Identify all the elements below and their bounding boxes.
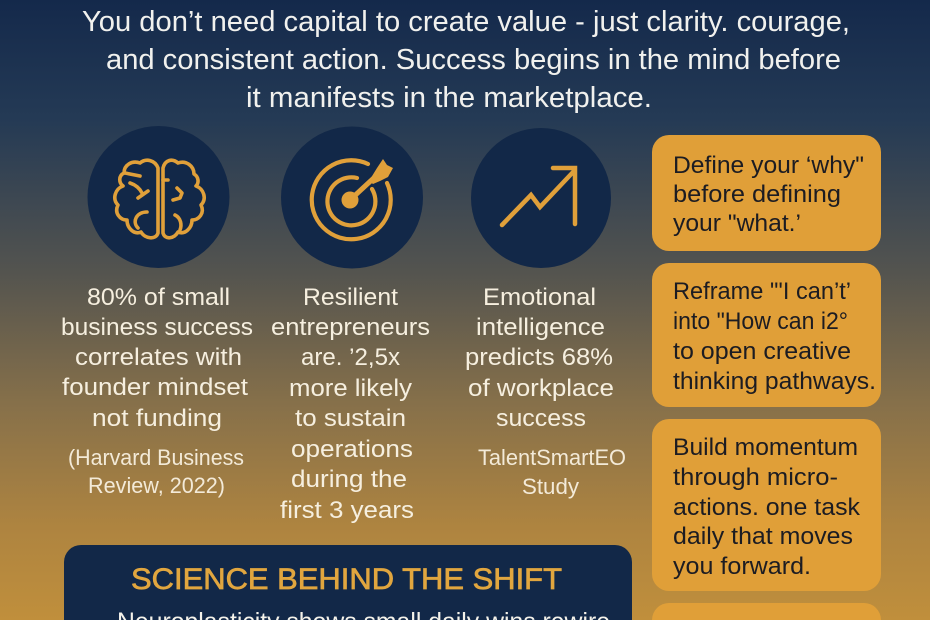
stat text: predicts 68% [465,344,613,371]
panel: tip 4 (cropped) [652,603,881,620]
panel: tip 1: Define your ‘why" [673,152,864,179]
stat text: 80% of small [87,284,230,311]
panel: tip 2 [652,263,881,407]
source [68,445,244,498]
stat text: Emotional [483,284,596,311]
stat text: first 3 years [280,497,414,524]
panel: tip 2: thinking pathways. [673,368,876,395]
panel: tip 3: Build momentum [673,434,858,461]
source [478,445,626,499]
intro text [82,6,850,114]
stat text [61,284,253,432]
stat text: business success [61,314,253,341]
heading: SCIENCE BEHIND THE SHIFT [131,563,562,596]
panel: tip 1: your "what.’ [673,210,801,237]
stat text: during the [291,466,407,493]
stat text: Resilient [303,284,398,311]
intro text: You don’t need capital to create value - just clarity. courage, [82,6,850,38]
source: Review, 2022) [88,473,225,498]
stat text: not funding [92,405,222,432]
intro text: and consistent action. Success begins in the mind before [106,44,841,76]
stat text: to sustain [295,405,406,432]
stat text: founder mindset [62,374,248,401]
icon: target [281,126,423,268]
panel: stat 3 growth [465,128,626,499]
panel: tip 1: before defining [673,181,841,208]
stat text: correlates with [75,344,242,371]
panel: tip 3 [652,419,881,591]
panel: tip 3: actions. one task [673,494,861,521]
intro text: it manifests in the marketplace. [246,82,652,114]
source: (Harvard Business [68,445,244,470]
icon: brain [88,126,230,268]
stat text: more likely [289,375,413,402]
stat text: operations [291,436,413,463]
panel: tip 3: daily that moves [673,523,853,550]
stat text: entrepreneurs [271,314,430,341]
panel: tip 1 [652,135,881,251]
source: Study [522,474,579,499]
panel: stat 1 brain [61,126,253,498]
stat text [465,284,614,432]
panel: tip 2: to open creative [673,338,851,365]
stat text [271,284,430,524]
panel: tip 3: through micro- [673,464,838,491]
panel: stat 2 target [271,126,430,524]
stat text: intelligence [476,314,605,341]
panel: science behind the shift [64,545,632,620]
stat text: are. ’2,5x [301,344,400,371]
stat text: success [496,405,586,432]
source: TalentSmartEO [478,445,626,470]
panel: tip 2: Reframe "'I can’t’ [673,278,851,305]
icon: growth arrow [471,128,611,268]
panel: tip 2: into "How can i2° [673,308,848,335]
panel: tip 3: you forward. [673,553,811,580]
stat text: of workplace [468,375,614,402]
